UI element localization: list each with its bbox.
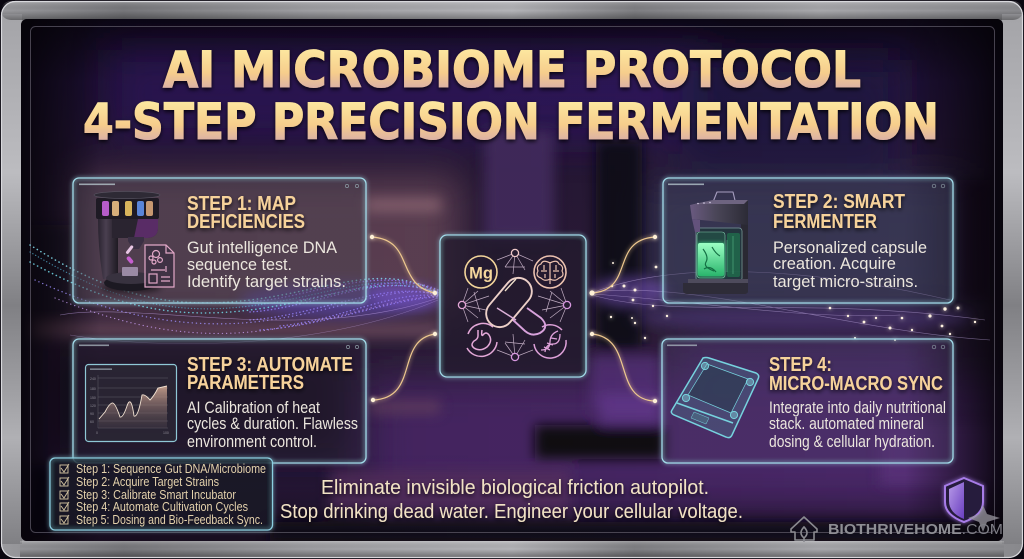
text: step 2 description: creation. Acquire xyxy=(773,254,896,273)
checklist text: Step 2: Acquire Target Strains xyxy=(76,474,219,489)
text: step 1 description: Identify target strains. xyxy=(187,272,346,291)
text: step 2 description: Personalized capsule xyxy=(773,238,927,257)
heading: step 1 xyxy=(187,192,305,233)
heading: step 3 xyxy=(187,353,353,394)
heading: step 3: PARAMETERS xyxy=(187,371,304,394)
checklist text xyxy=(76,461,266,527)
chart: area trend: 0 xyxy=(96,431,98,435)
icon: shield xyxy=(945,478,1000,532)
icon: sequencer device xyxy=(94,191,174,293)
icon: brain xyxy=(534,256,566,288)
text: closing statement: Stop drinking dead water. Engineer your cellular voltage. xyxy=(280,501,743,523)
panel: central hub xyxy=(440,235,586,377)
heading: step 4: MICRO-MACRO SYNC xyxy=(769,372,943,395)
text: step 1 description xyxy=(187,238,346,291)
title xyxy=(83,41,939,151)
chart: area trend: 240 xyxy=(90,377,96,381)
heading: step 4 xyxy=(769,353,943,395)
text: step 4 description: Integrate into daily nutritional xyxy=(769,399,946,417)
title line 2: 4-STEP PRECISION FERMENTATION xyxy=(83,93,939,151)
icon: house leaf xyxy=(791,517,817,542)
connector: hub to step 2 xyxy=(592,237,655,293)
particle field: right xyxy=(592,262,990,341)
icon: DNA xyxy=(534,325,566,358)
icon: capsule xyxy=(481,272,545,335)
text: step 3 description xyxy=(187,398,358,451)
text: step 4 description: stack. automated mineral xyxy=(769,415,924,433)
panel: step 1 xyxy=(73,178,366,303)
text: closing statement: Eliminate invisible biological friction autopilot. xyxy=(321,477,709,499)
checklist text: Step 1: Sequence Gut DNA/Microbiome xyxy=(76,461,266,476)
chart: area trend: 60 xyxy=(90,420,94,424)
chart: area trend: 180 xyxy=(90,387,96,391)
icon: smart fermenter xyxy=(683,192,748,294)
watermark xyxy=(791,517,1003,542)
heading: step 1: DEFICIENCIES xyxy=(187,210,305,233)
panel: step 4 xyxy=(662,339,953,463)
icon: report document xyxy=(145,245,174,287)
connector nodes xyxy=(370,235,657,403)
heading: step 3: STEP 3: AUTOMATE xyxy=(187,353,353,376)
text: step 3 description: cycles & duration. Flawless xyxy=(187,414,358,433)
heading: step 2: FERMENTER xyxy=(773,210,877,233)
text: step 2 description xyxy=(773,238,927,291)
heading: step 4: STEP 4: xyxy=(769,353,832,376)
chart: area trend: 150 xyxy=(90,396,96,400)
connector: hub to step 4 xyxy=(592,334,655,401)
icon: magnesium xyxy=(465,256,497,288)
checklist text: Step 4: Automate Cultivation Cycles xyxy=(76,499,248,514)
chart: area trend xyxy=(86,364,176,442)
icon: stomach xyxy=(467,324,497,356)
heading: step 2 xyxy=(773,190,905,233)
text: watermark domain: BIOTHRIVEHOME .COM xyxy=(828,522,1003,538)
text: step 3 description: environment control. xyxy=(187,432,317,451)
checklist text: Step 3: Calibrate Smart Incubator xyxy=(76,487,237,502)
panel: checklist xyxy=(50,458,272,530)
text: step 4 description xyxy=(769,399,946,451)
connector: step 3 to hub xyxy=(373,334,435,400)
icon: magnesium: Mg xyxy=(469,264,493,282)
icon: network fans xyxy=(462,253,567,357)
heading: step 1: STEP 1: MAP xyxy=(187,192,296,215)
chart: area trend: 90 xyxy=(90,412,94,416)
title line 1: AI MICROBIOME PROTOCOL xyxy=(163,41,861,99)
text: closing statement xyxy=(280,477,743,523)
text: step 2 description: target micro-strains. xyxy=(773,272,918,291)
heading: step 2: STEP 2: SMART xyxy=(773,190,905,213)
panel: step 3 xyxy=(73,339,366,463)
icon: digital scale xyxy=(671,358,759,438)
text: step 4 description: dosing & cellular hydration. xyxy=(769,433,935,451)
panel: step 2 xyxy=(663,178,953,303)
text: step 1 description: Gut intelligence DNA xyxy=(187,238,338,257)
text: step 1 description: sequence test. xyxy=(187,255,292,274)
text: step 3 description: AI Calibration of heat xyxy=(187,398,320,417)
chart: area trend: 120 xyxy=(90,404,96,408)
icon: network nodes xyxy=(458,249,571,361)
checklist icons xyxy=(60,464,69,524)
chart: area trend: 100 xyxy=(163,431,169,435)
connector: step 1 to hub xyxy=(372,237,435,293)
particle wave: left xyxy=(30,245,440,344)
checklist text: Step 5: Dosing and Bio-Feedback Sync. xyxy=(76,512,263,527)
connectors xyxy=(372,237,655,401)
